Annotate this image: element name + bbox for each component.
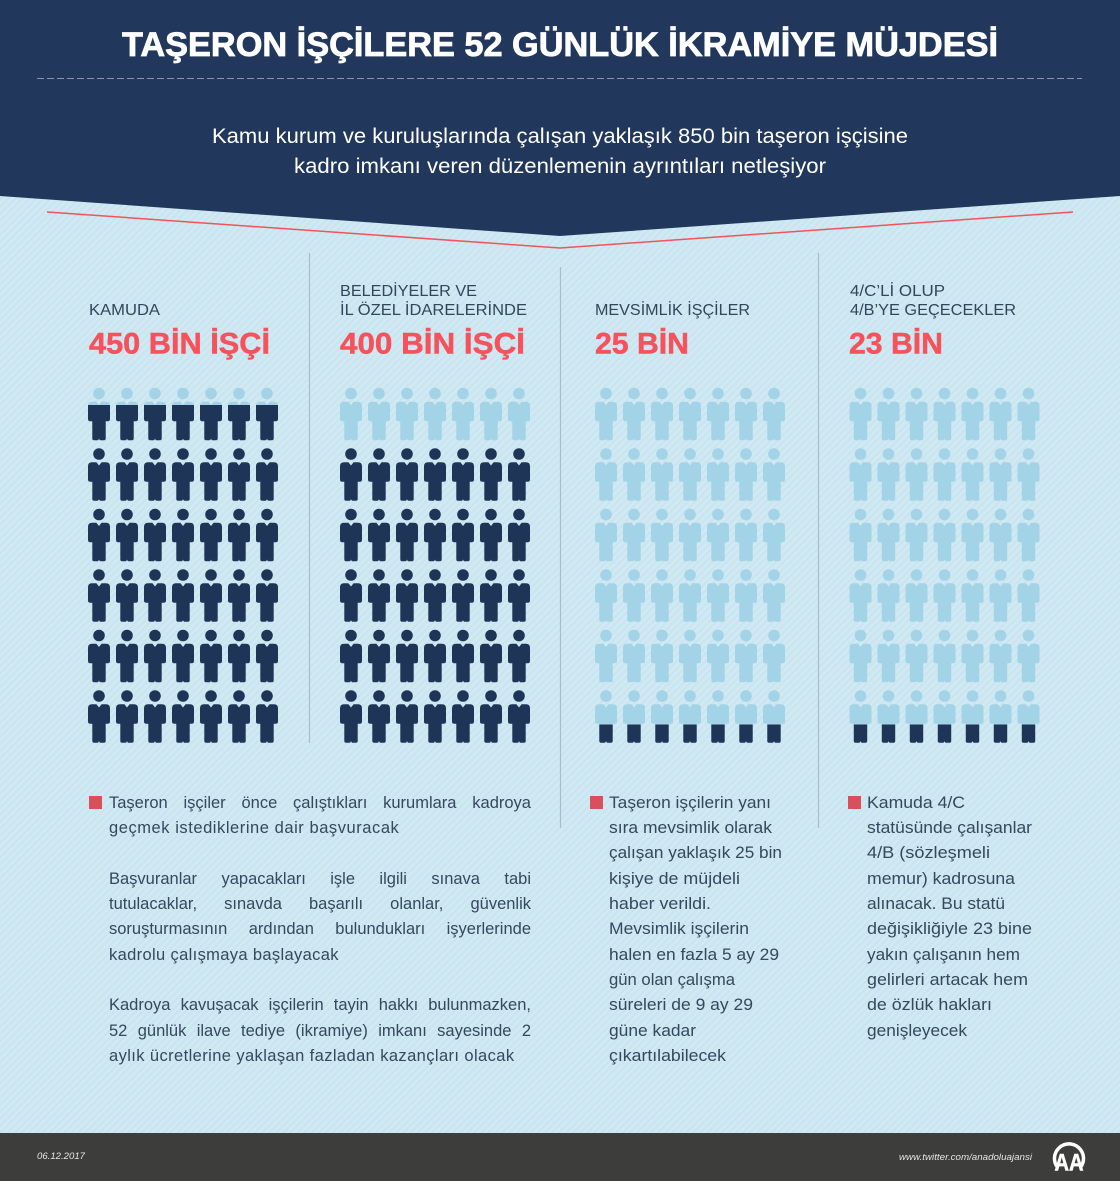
text block: mevsimlik [609, 794, 782, 1065]
text: kadrolu çalışmaya başlayacak [109, 946, 339, 964]
panel heading: 4/C [849, 281, 1016, 360]
title: TAŞERON İŞÇİLERE 52 GÜNLÜK İKRAMİYE MÜJDESİ [122, 26, 998, 64]
panel heading: kamuda: 450 BİN İŞÇİ [89, 328, 270, 360]
text block: mevsimlik: güne kadar [609, 1022, 697, 1040]
bullet: column 3 [590, 796, 603, 809]
text block: mevsimlik: süreleri de 9 ay 29 [609, 996, 753, 1014]
text block: 4/C: alınacak. Bu statü [867, 895, 1005, 913]
panel heading: belediyeler: 400 BİN İŞÇİ [340, 328, 525, 360]
subtitle: kadro imkanı veren düzenlemenin ayrıntıları netleşiyor [294, 155, 826, 178]
panel heading: 4/C: 4/B’YE GEÇECEKLER [850, 302, 1016, 319]
text block: mevsimlik: Taşeron işçilerin yanı [609, 794, 771, 812]
pictogram: kamuda 450 bin [88, 388, 278, 743]
pictogram: belediyeler 400 bin [340, 388, 530, 743]
text: Taşeron işçiler önce çalıştıkları kurumlara kadroya [109, 794, 531, 812]
text block: column 1 [109, 794, 531, 1065]
text block: mevsimlik: Mevsimlik işçilerin [609, 920, 749, 938]
text: 52 günlük ilave tediye (ikramiye) imkanı sayesinde 2 [109, 1022, 531, 1040]
text block: 4/C: statüsünde çalışanlar [867, 819, 1033, 837]
panel heading: belediyeler [340, 281, 527, 360]
footer bar [0, 1133, 1120, 1181]
text block: mevsimlik: gün olan çalışma [609, 971, 736, 989]
text: geçmek istediklerine dair başvuracak [109, 819, 399, 837]
text: Kadroya kavuşacak işçilerin tayin hakkı bulunmazken, [109, 996, 531, 1014]
header banner [0, 0, 1120, 236]
text block: mevsimlik: sıra mevsimlik olarak [609, 819, 773, 837]
bullet: column 4 [848, 796, 861, 809]
text block: 4/C: yakın çalışanın hem [867, 946, 1020, 964]
panel heading: belediyeler: İL ÖZEL İDARELERİNDE [340, 300, 527, 319]
pictogram: mevsimlik 25 bin [595, 388, 785, 743]
panel heading: kamuda [89, 302, 270, 360]
panel heading: mevsimlik [595, 300, 750, 360]
red chevron line [47, 212, 1073, 248]
panel heading: kamuda: KAMUDA [89, 302, 160, 319]
panel heading: belediyeler: BELEDİYELER VE [340, 281, 477, 300]
icon: AA logo: AA [1054, 1150, 1084, 1176]
text: aylık ücretlerine yaklaşan fazladan kazançları olacak [109, 1047, 514, 1065]
text: tutulacaklar, sınavda başarılı olanlar, güvenlik [109, 895, 531, 913]
text block: 4/C: memur) kadrosuna [867, 870, 1016, 888]
text block: 4/C: değişikliğiyle 23 bine [867, 920, 1032, 938]
panel heading: 4/C: 4/C’Lİ OLUP [850, 281, 945, 300]
text block: 4/C: Kamuda 4/C [867, 794, 965, 812]
subtitle: Kamu kurum ve kuruluşlarında çalışan yaklaşık 850 bin taşeron işçisine [212, 125, 908, 148]
text block: 4/C: 4/B (sözleşmeli [867, 844, 990, 862]
text block: mevsimlik: çıkartılabilecek [609, 1047, 727, 1065]
text block: 4/C: genişleyecek [867, 1022, 968, 1040]
text block: mevsimlik: çalışan yaklaşık 25 bin [609, 844, 782, 862]
text block: mevsimlik: halen en fazla 5 ay 29 [609, 946, 779, 964]
text block: 4/C [867, 794, 1033, 1040]
text block: 4/C: gelirleri artacak hem [867, 971, 1028, 989]
text block: mevsimlik: kişiye de müjdeli [609, 870, 740, 888]
text: Başvuranlar yapacakları işle ilgili sınava tabi [109, 870, 531, 888]
text block: mevsimlik: haber verildi. [609, 895, 711, 913]
twitter link: www.twitter.com/anadoluajansi [899, 1152, 1033, 1163]
date: 06.12.2017 [37, 1151, 86, 1162]
pictogram: 4/C 23 bin [850, 388, 1040, 743]
panel heading: mevsimlik: 25 BİN [595, 328, 689, 360]
text: soruşturmasının ardından bulundukları işyerlerinde [109, 920, 531, 938]
bullet: column 1 [89, 796, 102, 809]
subtitle [212, 125, 908, 178]
panel heading: 4/C: 23 BİN [849, 328, 943, 360]
text block: 4/C: de özlük hakları [867, 996, 992, 1014]
panel heading: mevsimlik: MEVSİMLİK İŞÇİLER [595, 300, 750, 319]
